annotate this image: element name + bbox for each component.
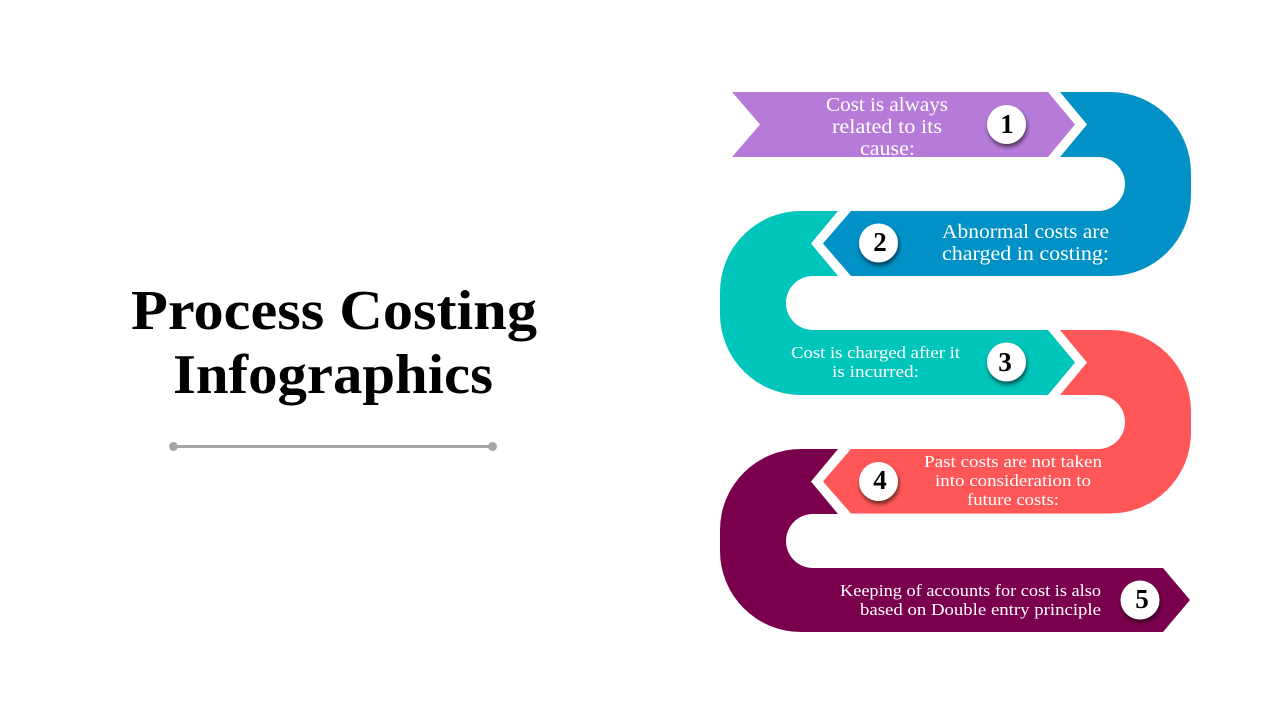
step 5: maroon curved band — [720, 449, 1190, 632]
step 3: teal curved band — [720, 211, 1075, 395]
step 1: purple arrow — [732, 92, 1075, 160]
step 4 text: into consideration to — [935, 471, 1091, 490]
step 3 text: Cost is charged after it — [791, 343, 960, 362]
step 2 text: Abnormal costs are — [942, 221, 1109, 243]
title divider with end dots — [169, 442, 497, 451]
step 2 number badge: 2 — [873, 227, 887, 257]
step 5 text: Keeping of accounts for cost is also — [840, 581, 1101, 600]
step 2: blue curved band — [823, 92, 1191, 276]
title — [131, 280, 537, 406]
step 3 number badge — [987, 342, 1026, 382]
step 2 text — [942, 221, 1109, 265]
step 5 text: based on Double entry principle — [860, 600, 1101, 619]
title: Process Costing — [131, 280, 537, 342]
step 3 number badge: 3 — [998, 347, 1012, 377]
step 1 text: cause: — [860, 138, 915, 160]
step 4: coral curved band — [823, 330, 1191, 514]
step 2 text: charged in costing: — [942, 243, 1109, 265]
step 5 number badge — [1120, 580, 1160, 620]
step 5 text — [840, 581, 1101, 619]
step 1 text: related to its — [832, 116, 942, 138]
step 1 number badge: 1 — [1000, 109, 1014, 139]
step 2 number badge — [859, 224, 898, 262]
step 1 number badge — [987, 105, 1026, 144]
step 4 text — [924, 452, 1103, 509]
step 4 text: future costs: — [967, 490, 1059, 509]
step 4 number badge — [859, 462, 898, 501]
step 3 text: is incurred: — [832, 362, 919, 381]
step 1 text: Cost is always — [826, 94, 948, 116]
step 1 text — [826, 94, 948, 160]
title: Infographics — [173, 344, 493, 406]
step 4 text: Past costs are not taken — [924, 452, 1103, 471]
step 5 number badge: 5 — [1135, 584, 1149, 614]
step 4 number badge: 4 — [873, 465, 887, 495]
step 3 text — [791, 343, 960, 381]
